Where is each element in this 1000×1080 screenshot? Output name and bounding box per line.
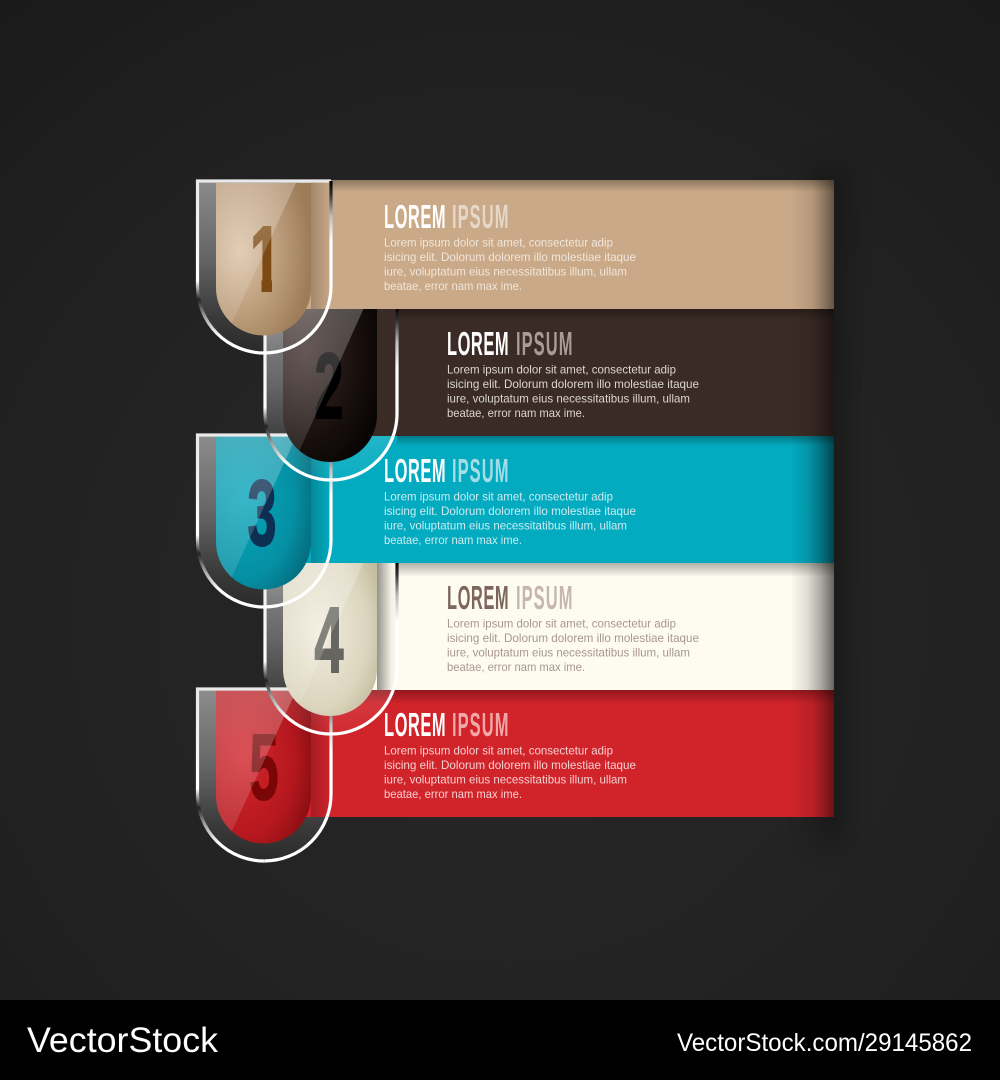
icon: pill 4: [283, 563, 377, 716]
icon: pill 5: [216, 690, 311, 844]
text block: step 4: IPSUM: [516, 579, 573, 617]
number 5: 5: [250, 715, 278, 819]
text block: step 1: isicing elit. Dolorum dolorem illo molestiae itaque: [384, 251, 636, 264]
text block: step 4: Lorem ipsum dolor sit amet, consectetur adip: [447, 618, 676, 630]
text block: step 3: [384, 452, 636, 547]
text block: step 2: iure, voluptatum eius necessitatibus illum, ullam: [447, 392, 690, 406]
text block: step 5: [384, 706, 636, 801]
text block: step 3: iure, voluptatum eius necessitatibus illum, ullam: [384, 520, 627, 532]
panel: step 5 red band: [196, 680, 834, 868]
text block: step 5: beatae, error nam max ime.: [384, 788, 522, 801]
text block: step 3: Lorem ipsum dolor sit amet, consectetur adip: [384, 490, 613, 504]
text block: step 2: [447, 325, 699, 420]
text block: step 5: LOREM: [384, 706, 446, 744]
panel: step 3 teal band: [196, 426, 834, 614]
text block: step 4: LOREM: [447, 579, 509, 617]
text block: step 1: iure, voluptatum eius necessitatibus illum, ullam: [384, 266, 627, 278]
number 3: 3: [248, 461, 276, 565]
icon: pill 2: [283, 309, 377, 462]
footer image id: VectorStock.com/29145862: [677, 1029, 972, 1057]
text block: step 1: [384, 198, 636, 293]
icon: pill 3: [216, 436, 311, 590]
text block: step 1: LOREM: [384, 198, 446, 236]
footer logo text: VectorStock: [27, 1021, 219, 1060]
text block: step 1: beatae, error nam max ime.: [384, 280, 522, 293]
text block: step 5: IPSUM: [452, 706, 509, 744]
text block: step 4: [447, 579, 699, 674]
text block: step 3: LOREM: [384, 452, 446, 490]
text block: step 5: isicing elit. Dolorum dolorem illo molestiae itaque: [384, 759, 636, 772]
text block: step 5: Lorem ipsum dolor sit amet, consectetur adip: [384, 744, 613, 758]
text block: step 4: isicing elit. Dolorum dolorem illo molestiae itaque: [447, 632, 699, 645]
text block: step 1: IPSUM: [452, 198, 509, 236]
text block: step 3: isicing elit. Dolorum dolorem illo molestiae itaque: [384, 505, 636, 518]
text block: step 4: beatae, error nam max ime.: [447, 661, 585, 674]
text block: step 2: isicing elit. Dolorum dolorem illo molestiae itaque: [447, 378, 699, 391]
text block: step 5: iure, voluptatum eius necessitatibus illum, ullam: [384, 774, 627, 786]
footer bar: [0, 1000, 1000, 1080]
panel: step 4 cream band: [264, 553, 834, 741]
text block: step 4: iure, voluptatum eius necessitatibus illum, ullam: [447, 646, 690, 660]
text block: step 2: IPSUM: [516, 325, 573, 363]
number 1: 1: [250, 209, 281, 312]
text block: step 1: Lorem ipsum dolor sit amet, consectetur adip: [384, 236, 613, 250]
panel: step 1 tan band: [196, 172, 834, 360]
panel: step 2 brown band: [264, 299, 834, 487]
icon: pill 1: [216, 183, 311, 336]
text block: step 3: beatae, error nam max ime.: [384, 534, 522, 547]
number 2: 2: [315, 334, 343, 438]
number 4: 4: [315, 588, 344, 692]
text block: step 2: Lorem ipsum dolor sit amet, consectetur adip: [447, 364, 676, 376]
text block: step 2: LOREM: [447, 325, 509, 363]
text block: step 3: IPSUM: [452, 452, 509, 490]
text block: step 2: beatae, error nam max ime.: [447, 407, 585, 420]
